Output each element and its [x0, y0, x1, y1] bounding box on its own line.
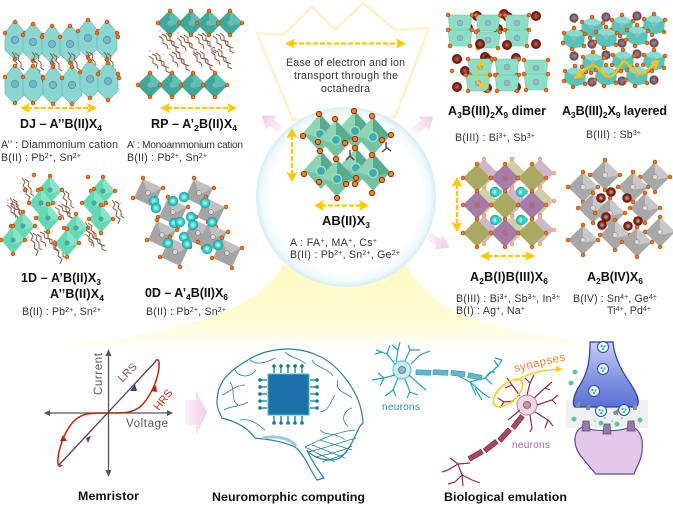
panel: AB(II)X3 structure	[300, 108, 394, 201]
horizontal arrow: double perovskite	[480, 251, 535, 261]
label: blue neurons: neurons	[382, 402, 420, 413]
heading: layered: A3B(III)2X9 layered	[562, 104, 667, 120]
heading: DJ: DJ – A’’B(II)X4	[20, 117, 102, 132]
composition text: AB(II)X3	[290, 237, 400, 261]
label: red neurons: neurons	[512, 440, 550, 451]
transport caption: octahedra	[321, 83, 370, 95]
horizontal arrow AB(II)X3	[314, 200, 369, 211]
composition text: AB(II)X3: B(II) : Pb2+, Sn2+, Ge2+	[290, 249, 400, 261]
arrow: RP	[160, 103, 237, 113]
vertical arrow: double perovskite	[452, 177, 462, 232]
transport caption: transport through the	[294, 70, 398, 82]
pink arrow: to DJ/RP	[256, 108, 286, 137]
heading: AB(II)X3: AB(II)X3	[322, 213, 370, 230]
chart: memristor I-V curve: Voltage	[126, 418, 168, 430]
chart: memristor I-V curve	[44, 349, 176, 477]
icon: chip	[258, 364, 319, 425]
transport caption	[286, 57, 405, 95]
arrow: DJ	[20, 103, 97, 113]
heading: 1D	[21, 271, 104, 302]
panel: A2B(IV)X6 structure	[566, 158, 673, 259]
composition text: double perovskite: B(III) : Bi3+, Sb3+, In3+	[456, 293, 560, 305]
composition text: DJ	[1, 139, 118, 164]
composition text: RP: B(II) : Pb2+, Sn2+	[127, 152, 207, 164]
heading: neuromorphic computing: Neuromorphic computing	[212, 490, 365, 504]
chart: memristor I-V curve: LRS	[116, 361, 140, 385]
composition text: layered: B(III) : Sb3+	[586, 129, 641, 141]
composition text: RP	[127, 140, 243, 164]
panel: A2B(I)B(III)X6 structure	[461, 157, 556, 249]
pink arrow: to A2BBX6	[424, 228, 453, 256]
crown outline	[257, 3, 429, 120]
composition text: 1D: B(II) : Pb2+, Sn2+	[22, 306, 101, 318]
icon: brain with chip	[217, 349, 363, 480]
icon: synapse illustration	[566, 342, 648, 474]
panel: RP structure	[136, 9, 244, 99]
composition text: double perovskite	[456, 293, 560, 317]
composition text: 0D: B(II) : Pb2+, Sn2+	[146, 306, 226, 318]
presynaptic terminal	[573, 342, 638, 407]
synapse highlight ellipse	[489, 374, 527, 412]
yellow light fan	[50, 265, 620, 346]
icon: red neuron axon	[468, 414, 524, 461]
pink arrow: to A3B2X9	[409, 109, 439, 138]
heading: 1D: A’’B(II)X4	[50, 287, 104, 302]
composition text: A2B(IV)X6: Ti4+, Pd4+	[607, 305, 651, 317]
composition text: RP: A’ : Monoammonium cation	[127, 140, 243, 151]
heading: memristor: Memristor	[78, 489, 139, 503]
heading: 0D: 0D – A’4B(II)X6	[145, 286, 228, 302]
label: synapses: synapses	[513, 351, 567, 375]
postsynaptic terminal	[575, 427, 642, 474]
composition text: A2B(IV)X6	[573, 293, 657, 317]
heading: dimer: A3B(III)2X9 dimer	[448, 104, 546, 120]
composition text: dimer: B(III) : Bi3+, Sb3+	[455, 132, 535, 144]
pink arrow: memristor to brain	[185, 390, 207, 435]
composition text: DJ: B(II) : Pb2+, Sn2+	[1, 152, 81, 164]
panel: 1D structure	[0, 173, 124, 264]
transport caption: Ease of electron and ion	[286, 57, 405, 69]
composition text: double perovskite: B(I) : Ag+, Na+	[456, 305, 525, 317]
chart: memristor I-V curve: Current	[93, 352, 105, 395]
heading: A2B(IV)X6: A2B(IV)X6	[587, 270, 643, 286]
panel: 0D structure	[131, 176, 244, 270]
heading: RP: RP – A’2B(II)X4	[151, 117, 237, 132]
vertical arrow AB(II)X3	[286, 128, 298, 182]
panel: DJ structure	[3, 18, 121, 106]
central sphere	[256, 107, 436, 287]
heading: biological emulation: Biological emulation	[444, 490, 567, 504]
heading: 1D: 1D – A’B(II)X3	[21, 271, 101, 286]
chart: memristor I-V curve: HRS	[152, 387, 176, 413]
icon: red neuron	[442, 375, 558, 486]
heading: double perovskite: A2B(I)B(III)X6	[470, 270, 548, 286]
arrow: synapses pointer	[516, 366, 563, 381]
icon: blue neuron axon	[416, 370, 482, 380]
icon: blue neuron	[372, 342, 502, 400]
transport arrow	[285, 38, 406, 48]
composition text: AB(II)X3: A : FA+, MA+, Cs+	[290, 237, 377, 249]
panel: A3B2X9 layered structure	[561, 11, 667, 89]
panel: A3B2X9 dimer structure	[446, 9, 550, 93]
composition text: A2B(IV)X6: B(IV) : Sn4+, Ge4+	[573, 293, 657, 305]
composition text: DJ: A’’ : Diammonium cation	[1, 139, 118, 151]
